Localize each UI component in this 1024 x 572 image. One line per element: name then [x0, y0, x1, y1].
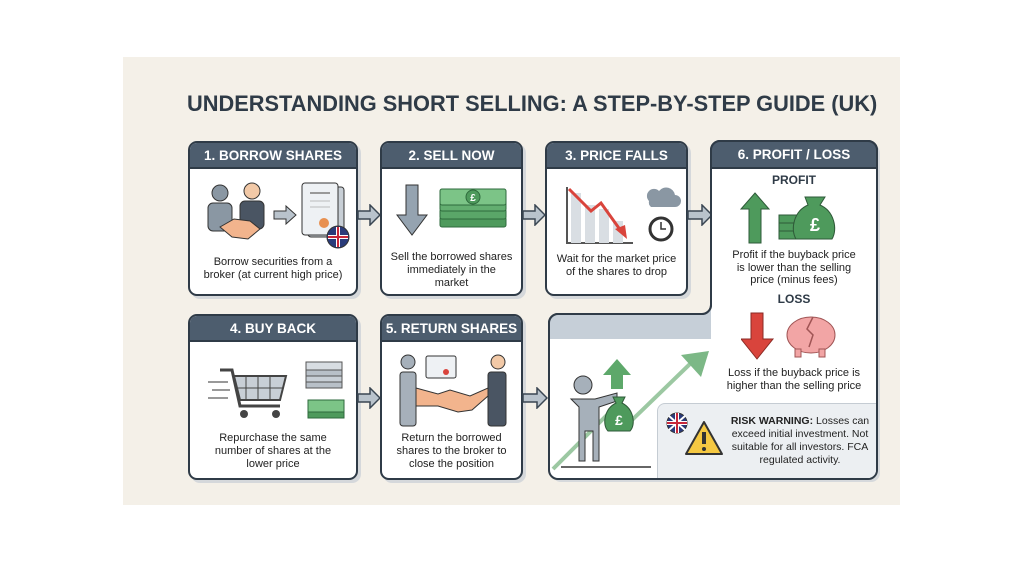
text: step 2 description: Sell the borrowed shares	[391, 251, 512, 263]
heading: 2. sell now: 2. SELL NOW	[408, 148, 494, 163]
heading: 3. price falls: 3. PRICE FALLS	[565, 148, 668, 163]
heading: 1. borrow shares	[190, 143, 356, 169]
icon: green arrow and money bag	[740, 192, 836, 244]
arrow: 3 to 6	[688, 204, 710, 226]
title: UNDERSTANDING SHORT SELLING: A STEP-BY-STEP GUIDE (UK)	[187, 91, 877, 116]
text: step 5 description: shares to the broker to	[396, 445, 507, 457]
text: step 4 description: number of shares at the	[215, 445, 331, 457]
panel: step 3 price falls	[545, 141, 688, 296]
text: step 3 description	[556, 253, 676, 278]
heading: 3. price falls	[547, 143, 686, 169]
icon: down arrow and cash	[396, 184, 506, 236]
heading: 5. return shares: 5. RETURN SHARES	[386, 321, 517, 336]
subheading: profit: PROFIT	[772, 173, 816, 187]
text: step 4 description: lower price	[246, 458, 300, 470]
text: risk warning: RISK WARNING: Losses can exceed initial investment. Not suitable for all investors. FCA regulated activity.	[731, 415, 869, 466]
panel: step 4 buy back	[188, 314, 358, 480]
text: step 5 description: close the position	[409, 458, 494, 470]
text: profit explanation: is lower than the selling	[737, 262, 851, 274]
panel: step 6 profit / loss (L-shaped)	[548, 140, 880, 482]
heading: 5. return shares	[382, 316, 521, 342]
heading: 4. buy back	[190, 316, 356, 342]
icon: warning triangle	[685, 421, 723, 455]
text: profit explanation: price (minus fees)	[750, 274, 838, 286]
text: loss explanation: higher than the selling price	[727, 380, 861, 392]
text: loss explanation: Loss if the buyback price is	[728, 367, 860, 379]
heading: 4. buy back: 4. BUY BACK	[230, 321, 316, 336]
icon: down arrow and cash: £	[470, 193, 476, 204]
icon: green arrow and money bag: £	[810, 215, 820, 235]
icon: handshake and certificate	[208, 182, 350, 248]
arrow: 5 to 6	[522, 387, 548, 409]
arrow: 2 to 3	[522, 204, 545, 226]
icon: uk flag	[666, 412, 688, 434]
callout: risk warning	[657, 403, 876, 478]
icon: falling chart, cloud and clock	[566, 187, 681, 244]
heading: 2. sell now	[382, 143, 521, 169]
illustration: person holding money bag with rising trend: £	[615, 412, 623, 428]
text: step 4 description	[215, 432, 331, 470]
icon: returning shares handshake	[400, 354, 506, 426]
text: step 5 description: Return the borrowed	[401, 432, 502, 444]
text: step 1 description: broker (at current high price)	[204, 269, 342, 281]
heading: 6. profit / loss: 6. PROFIT / LOSS	[738, 147, 850, 162]
icon: shopping cart and cash	[208, 362, 344, 418]
text: step 1 description	[204, 256, 342, 281]
text: step 2 description: immediately in the	[407, 264, 496, 276]
text: step 2 description: market	[435, 277, 468, 289]
arrow: 4 to 5	[358, 387, 380, 409]
text: step 5 description	[396, 432, 507, 470]
panel: step 1 borrow shares	[188, 141, 358, 296]
text: step 3 description: Wait for the market price	[557, 253, 676, 265]
text: step 2 description	[391, 251, 512, 289]
text: step 4 description: Repurchase the same	[219, 432, 327, 444]
text: profit explanation	[732, 249, 856, 286]
text: step 3 description: of the shares to drop	[566, 266, 667, 278]
icon: red arrow and broken piggy bank	[741, 312, 836, 360]
panel: step 2 sell now	[380, 141, 523, 296]
arrow: 1 to 2	[358, 204, 380, 226]
text: loss explanation	[727, 367, 861, 392]
subheading: loss: LOSS	[778, 292, 810, 306]
heading: 1. borrow shares: 1. BORROW SHARES	[204, 148, 342, 163]
panel: step 5 return shares	[380, 314, 523, 480]
text: profit explanation: Profit if the buyback price	[732, 249, 856, 261]
text: step 1 description: Borrow securities from a	[214, 256, 332, 268]
illustration: person holding money bag with rising trend	[552, 351, 709, 470]
